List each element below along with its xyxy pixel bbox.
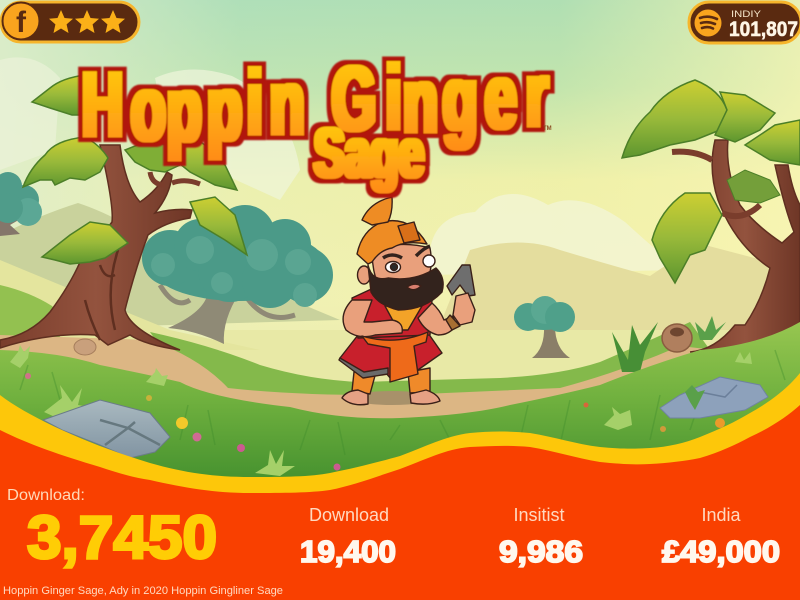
leaf clusters xyxy=(32,75,85,115)
ear xyxy=(358,266,370,284)
trademark mark: TM xyxy=(543,126,552,132)
title: Ginger xyxy=(332,44,548,152)
spiky plant xyxy=(612,322,658,372)
background: sky xyxy=(0,0,800,430)
background: mid meadow xyxy=(150,322,710,405)
stat value: 3,7450: 3,7450 xyxy=(27,504,217,571)
skirt xyxy=(340,333,442,380)
badge: spotify count: INDIY xyxy=(731,9,762,20)
title: Hoppin xyxy=(82,52,305,161)
panel: red stats band xyxy=(0,405,800,600)
stat: Insitist: 9,986 xyxy=(499,534,583,569)
shadow xyxy=(352,391,432,405)
wave band: yellow xyxy=(0,373,800,600)
leaf clusters xyxy=(622,80,727,158)
footer note: Hoppin Ginger Sage, Ady in 2020 Hoppin Gingliner Sage xyxy=(3,585,283,597)
flowers xyxy=(25,373,725,470)
badge: facebook rating xyxy=(1,2,139,42)
trunk and branches xyxy=(0,145,192,350)
right arm xyxy=(418,303,456,335)
sash xyxy=(362,332,428,382)
rock right xyxy=(660,377,768,418)
foreground grass xyxy=(0,322,800,480)
face xyxy=(372,244,431,285)
trunk and branches xyxy=(690,140,800,352)
background: distant hills xyxy=(0,203,800,400)
title xyxy=(82,44,548,192)
teal tree centre-left xyxy=(142,205,333,344)
legs xyxy=(352,372,376,394)
stat: Download: 19,400 xyxy=(300,534,396,569)
plant by pot xyxy=(695,316,726,340)
pebble xyxy=(74,339,96,355)
stat label: Download main: Download: xyxy=(7,487,85,504)
small teal tree right xyxy=(514,296,575,358)
dirt path xyxy=(0,335,715,430)
clay pot xyxy=(662,324,692,352)
beard xyxy=(368,265,443,310)
bracelet xyxy=(446,315,460,330)
stat: Insitist xyxy=(499,505,583,569)
hand xyxy=(453,293,475,325)
left arm xyxy=(343,300,402,337)
badge: spotify count xyxy=(689,2,800,43)
title: Sage xyxy=(314,114,424,192)
left tree xyxy=(0,75,247,350)
stat: Insitist: Insitist xyxy=(513,505,565,525)
eyes xyxy=(386,262,400,272)
grass blades xyxy=(20,350,785,455)
feet xyxy=(342,390,368,405)
character: sage xyxy=(339,197,475,405)
torso xyxy=(352,285,432,338)
icon: facebook f: f xyxy=(16,6,27,39)
plant on right rock xyxy=(685,385,705,410)
stat: Download xyxy=(300,505,396,569)
small teal tree left xyxy=(0,172,42,236)
icon: spotify xyxy=(694,10,722,36)
stat: India: India xyxy=(701,505,741,525)
rock left xyxy=(43,400,170,458)
stat: India xyxy=(662,505,780,569)
stat: India: £49,000 xyxy=(662,534,780,569)
turban xyxy=(357,221,427,264)
foreground plants xyxy=(10,345,752,476)
background: left meadow xyxy=(0,285,62,345)
icon: three stars xyxy=(49,10,125,33)
stat: Download: Download xyxy=(309,505,389,525)
right tree xyxy=(622,80,800,352)
stone tool xyxy=(447,265,475,296)
